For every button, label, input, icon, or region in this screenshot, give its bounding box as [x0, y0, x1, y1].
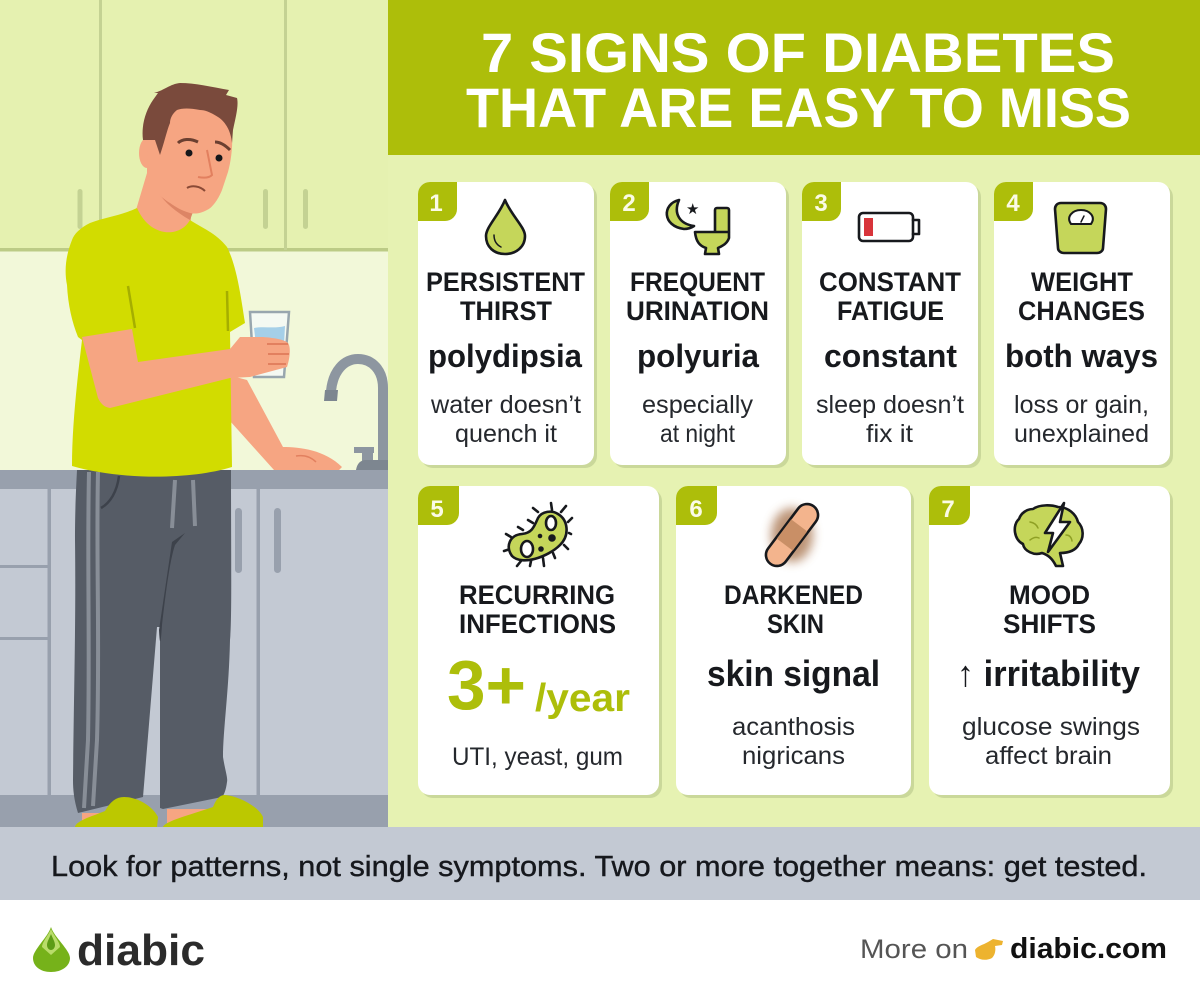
link: more on diabic.com [860, 933, 1167, 965]
icon: weighing scale [1055, 203, 1106, 253]
card 2: frequent urination [610, 182, 789, 468]
card 3: constant fatigue: sleep doesn’t [816, 391, 964, 419]
card 7: mood shifts [929, 486, 1173, 798]
card 2: frequent urination: URINATION [626, 296, 769, 326]
back arm resting on counter [228, 375, 342, 470]
card 6: darkened skin: skin signal [707, 653, 880, 694]
card 5: recurring infections [418, 486, 662, 798]
card 1: persistent thirst: THIRST [460, 296, 552, 326]
card 7: mood shifts: glucose swings [962, 713, 1140, 741]
card 2: frequent urination: 2 [622, 190, 636, 217]
icon: bandage on dark skin [762, 500, 822, 570]
link: more on diabic.com: diabic.com [1010, 933, 1167, 965]
neck [136, 160, 192, 240]
hair [143, 83, 238, 155]
stat: 3+ per year [447, 646, 630, 724]
card 7: mood shifts: 7 [941, 496, 955, 523]
card 2: frequent urination: especially [642, 391, 754, 419]
icon: bacterium [504, 503, 572, 566]
header banner [388, 0, 1200, 155]
slippers [75, 795, 263, 827]
takeaway band: Look for patterns, not single symptoms. Two or more together means: get tested. [51, 851, 1147, 883]
card 3: constant fatigue: CONSTANT [819, 267, 961, 297]
card 7: mood shifts: affect brain [985, 742, 1112, 770]
card 6: darkened skin: nigricans [742, 742, 845, 770]
card 4: weight changes: CHANGES [1018, 296, 1145, 326]
card 6: darkened skin [676, 486, 914, 798]
card 1: persistent thirst [418, 182, 597, 468]
card 5: recurring infections: INFECTIONS [459, 609, 616, 639]
icon: pointing hand [975, 939, 1003, 960]
card 5: recurring infections: UTI, yeast, gum [452, 743, 623, 771]
card 6: darkened skin: SKIN [767, 609, 824, 639]
stat: 3+ per year: /year [535, 677, 630, 720]
glass of water [250, 312, 289, 377]
card 7: mood shifts: SHIFTS [1003, 609, 1096, 639]
title [466, 21, 1131, 139]
card 4: weight changes: loss or gain, [1014, 391, 1149, 419]
front arm and hand [82, 329, 290, 408]
card 2: frequent urination: polyuria [637, 338, 759, 374]
card 3: constant fatigue: FATIGUE [837, 296, 944, 326]
stat: 3+ per year: 3+ [447, 646, 526, 724]
head [139, 83, 238, 214]
card 1: persistent thirst: PERSISTENT [426, 267, 585, 297]
icon: water drop [486, 200, 525, 254]
card 6: darkened skin: acanthosis [732, 713, 855, 741]
face details [178, 139, 230, 191]
title: 7 SIGNS OF DIABETES [481, 21, 1115, 84]
card 4: weight changes: unexplained [1014, 420, 1149, 448]
card 4: weight changes: 4 [1006, 190, 1020, 217]
card 6: darkened skin: DARKENED [724, 580, 863, 610]
card 3: constant fatigue: constant [824, 338, 957, 374]
logo: diabic: diabic [77, 926, 205, 975]
card 6: darkened skin: 6 [689, 496, 703, 523]
footer [0, 900, 1200, 1000]
card 7: mood shifts: ↑ irritability [957, 653, 1140, 694]
card 1: persistent thirst: water doesn’t [430, 391, 581, 419]
card 5: recurring infections: RECURRING [459, 580, 615, 610]
icon: faucet [324, 359, 388, 470]
card 7: mood shifts: MOOD [1009, 580, 1090, 610]
card 1: persistent thirst: polydipsia [428, 338, 582, 374]
icon: low battery [859, 213, 919, 241]
card 1: persistent thirst: quench it [455, 420, 557, 448]
trousers [73, 470, 231, 813]
icon: brain with lightning [1015, 503, 1083, 566]
card 4: weight changes [994, 182, 1173, 468]
card 2: frequent urination: FREQUENT [630, 267, 765, 297]
icon: moon and toilet: ★ [686, 201, 699, 218]
card 2: frequent urination: at night [660, 420, 735, 448]
icon: moon and toilet [667, 200, 729, 254]
link: more on diabic.com: More on [860, 934, 968, 964]
card 4: weight changes: WEIGHT [1031, 267, 1133, 297]
title: THAT ARE EASY TO MISS [466, 76, 1131, 139]
card 3: constant fatigue: fix it [866, 420, 913, 448]
t-shirt [66, 208, 245, 477]
kitchen scene [0, 0, 388, 827]
card 4: weight changes: both ways [1005, 338, 1158, 374]
card 3: constant fatigue [802, 182, 981, 468]
card 1: persistent thirst: 1 [429, 190, 443, 217]
card 5: recurring infections: 5 [430, 496, 444, 523]
card 3: constant fatigue: 3 [814, 190, 828, 217]
takeaway band [0, 827, 1200, 900]
